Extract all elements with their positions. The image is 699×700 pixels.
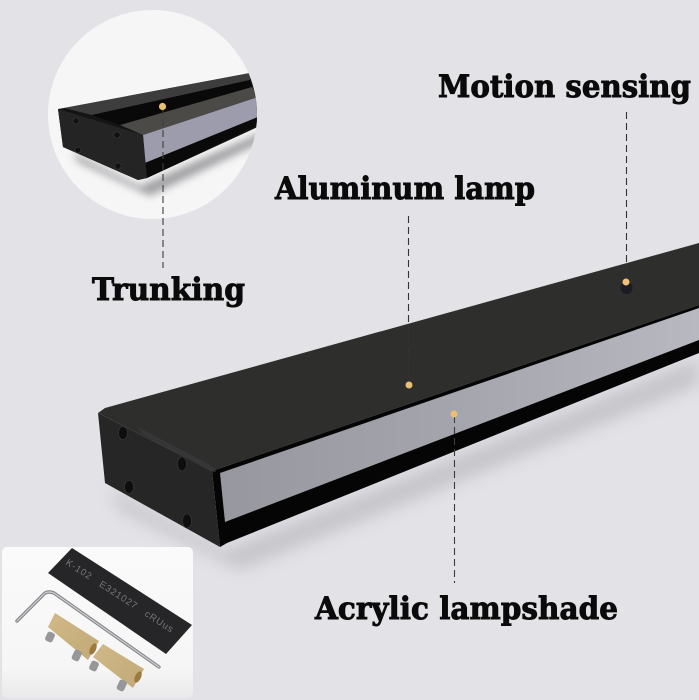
- lamp shadow: [110, 358, 699, 570]
- marker dot: [622, 278, 630, 286]
- heat shrink tube: [48, 548, 192, 654]
- marker dot: [159, 103, 166, 110]
- label: Aluminum lamp: [274, 171, 535, 207]
- leader line: [162, 108, 164, 268]
- label: Acrylic lampshade: [314, 591, 618, 627]
- inset circle: trunking detail: [48, 10, 262, 219]
- leader line: [454, 416, 456, 583]
- lamp dark lower body: [212, 305, 699, 547]
- label: Trunking: [92, 272, 245, 308]
- label: Motion sensing: [438, 69, 691, 105]
- main lamp: [98, 243, 699, 570]
- marker dot: [406, 382, 412, 388]
- lamp end cap: [98, 413, 220, 547]
- leader line: [408, 216, 410, 383]
- heat shrink tube: K-102 E321027 cRUus: [63, 557, 175, 635]
- callout: acrylic lampshade: [314, 410, 618, 627]
- marker dot: [450, 410, 458, 418]
- brass connector 2: [88, 644, 144, 692]
- brass connector 1: [44, 613, 99, 662]
- allen key: [17, 592, 159, 667]
- lamp diffuser: [220, 308, 699, 522]
- leader line: [626, 112, 628, 280]
- accessories panel: [2, 547, 193, 698]
- callout: aluminum lamp: [274, 171, 535, 388]
- end cap screws: [118, 426, 192, 528]
- callout: trunking: [92, 103, 245, 308]
- callout: motion sensing: [438, 69, 691, 294]
- lamp top face: [98, 243, 699, 471]
- sensor: [620, 282, 632, 294]
